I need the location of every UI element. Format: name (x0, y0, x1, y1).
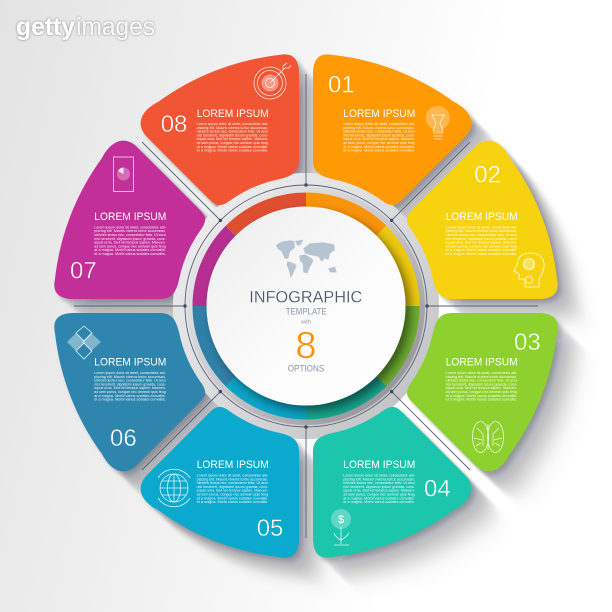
panel 05: nisi hendrerit, dignissim ipsum gravida, cons- (197, 485, 269, 489)
icon: tablet with pie chart (114, 157, 134, 192)
panel 07: LOREM IPSUM (94, 211, 166, 223)
panel 04 (313, 407, 471, 558)
panel 02: Lorem ipsum dolor sit amet, consectetur adi- (446, 225, 518, 229)
panel 02: et a magna. Morbi varius sodales convallis. (446, 252, 517, 256)
panel 03: at a magna. Morbi varius sodales convallis. (446, 394, 517, 398)
watermark (16, 13, 155, 41)
panel 02 (407, 141, 558, 299)
icon: light bulb (426, 106, 450, 139)
panel 01: piscing elit. Mauris viverra tortor accumsan, (343, 126, 415, 130)
panel 07 (54, 141, 205, 299)
icon: head with gears (514, 253, 544, 287)
center title: with (300, 320, 311, 326)
panel 01: at a magna. Morbi varius sodales convallis. (343, 145, 415, 149)
colored ring segments (192, 192, 420, 420)
panel 04: equat urna. Sed vel tempus sapien. Maecen- (343, 489, 416, 493)
panel 01: as sem purus, congue nec aenean quis feug (343, 141, 415, 145)
panel 08: equat urna. Sed vel tempus sapien. Maecen- (197, 137, 269, 141)
panel 05: Lorem ipsum dolor sit amet, consectetur adi- (197, 474, 269, 478)
panel 05 (141, 407, 299, 558)
panel 04: ultricies lectus nec, consectetur felis. Ut arcu (343, 481, 415, 485)
panel 05: piscing elit. Mauris viverra tortor accumsan, (197, 477, 268, 481)
panel 03: 03 (514, 329, 541, 356)
panel 05: as sem purus, congue nec aenean quis feug (197, 492, 268, 496)
panel 07: equat urna. Sed vel tempus sapien. Maecen- (94, 241, 167, 245)
panel 08: as sem purus, congue nec aenean quis feug (197, 141, 268, 145)
panel 03: piscing elit. Mauris viverra tortor accumsan, (446, 375, 517, 379)
panel 07: piscing elit. Mauris viverra tortor accumsan, (94, 229, 166, 233)
icon: target with arrow (254, 63, 291, 99)
panel 07: et a magna. Morbi varius sodales convallis. (94, 252, 166, 256)
panel 02: LOREM IPSUM (446, 211, 518, 223)
panel 01: nisi hendrerit, dignissim ipsum gravida, cons- (343, 133, 416, 137)
panel 06: 06 (110, 425, 137, 452)
panel 07: 07 (70, 258, 97, 285)
panel 07: Lorem ipsum dolor sit amet, consectetur adi- (94, 225, 167, 229)
panel 01: LOREM IPSUM (343, 108, 415, 120)
panel 03: Lorem ipsum dolor sit amet, consectetur adi- (446, 371, 518, 375)
panel 01: et a magna. Morbi varius sodales convallis. (343, 149, 415, 153)
panel 01: ultricies lectus nec, consectetur felis. Ut arcu (343, 130, 415, 134)
panel 04: nisi hendrerit, dignissim ipsum gravida, cons- (343, 485, 416, 489)
panel 08: et a magna. Morbi varius sodales convallis. (197, 149, 268, 153)
panel 06: equat urna. Sed vel tempus sapien. Maecen- (94, 386, 167, 390)
watermark: getty (16, 13, 75, 41)
panel 02: equat urna. Sed vel tempus sapien. Maecen- (446, 241, 518, 245)
panel 03: equat urna. Sed vel tempus sapien. Maecen- (446, 386, 518, 390)
panel 05: equat urna. Sed vel tempus sapien. Maecen- (197, 489, 269, 493)
panel 05: ultricies lectus nec, consectetur felis. Ut arcu (197, 481, 268, 485)
panel 07: nisi hendrerit, dignissim ipsum gravida, cons- (94, 237, 167, 241)
icon: brain (472, 422, 504, 452)
panel 01: equat urna. Sed vel tempus sapien. Maecen- (343, 137, 416, 141)
icon: globe (158, 469, 190, 507)
icon: world map (276, 240, 337, 278)
panel 06: LOREM IPSUM (94, 357, 166, 369)
panel 05: et a magna. Morbi varius sodales convallis. (197, 500, 268, 504)
panel 05: at a magna. Morbi varius sodales convallis. (197, 496, 268, 500)
central backing disc (173, 173, 439, 439)
center title: TEMPLATE (286, 307, 327, 318)
panel 04: Lorem ipsum dolor sit amet, consectetur adi- (343, 474, 416, 478)
panel 06: et a magna. Morbi varius sodales convallis. (94, 398, 166, 402)
center white circle (206, 206, 406, 406)
long shadows behind panels (56, 56, 598, 598)
panel 03: as sem purus, congue nec aenean quis feug (446, 390, 517, 394)
panel 03: nisi hendrerit, dignissim ipsum gravida, cons- (446, 382, 518, 386)
watermark: images (76, 13, 155, 41)
panel 04: et a magna. Morbi varius sodales convallis. (343, 500, 415, 504)
panel 03: ultricies lectus nec, consectetur felis. Ut arcu (446, 379, 517, 383)
icon: dollar plant (331, 509, 351, 545)
panel 02: piscing elit. Mauris viverra tortor accumsan, (446, 229, 517, 233)
panel 08: 08 (161, 111, 187, 138)
panel 06: as sem purus, congue nec aenean quis feug (94, 390, 166, 394)
panel 04: at a magna. Morbi varius sodales convallis. (343, 496, 415, 500)
panel 05: 05 (257, 515, 283, 542)
icon: dollar plant: $ (338, 514, 344, 526)
center hub ring (183, 183, 429, 429)
panel 01 (313, 54, 471, 205)
center title (249, 287, 362, 374)
panel 06: nisi hendrerit, dignissim ipsum gravida, cons- (94, 382, 167, 386)
panel 02: ultricies lectus nec, consectetur felis. Ut arcu (446, 233, 517, 237)
radial connector lines (74, 74, 538, 538)
panel 03 (407, 313, 558, 471)
panel 08: at a magna. Morbi varius sodales convallis. (197, 145, 268, 149)
panel 01: 01 (328, 72, 355, 98)
icon: puzzle (67, 326, 101, 359)
panel 06 (54, 313, 205, 471)
panel 08: nisi hendrerit, dignissim ipsum gravida, cons- (197, 133, 269, 137)
panel 03: LOREM IPSUM (446, 357, 518, 369)
center title: OPTIONS (288, 363, 324, 374)
panel 08 (141, 54, 299, 205)
panel 04: 04 (424, 476, 451, 503)
panel 07: as sem purus, congue nec aenean quis feug (94, 244, 166, 248)
panel 06: Lorem ipsum dolor sit amet, consectetur adi- (94, 371, 167, 375)
panel 03: et a magna. Morbi varius sodales convallis. (446, 398, 517, 402)
panel 07: at a magna. Morbi varius sodales convallis. (94, 248, 166, 252)
panel 06: piscing elit. Mauris viverra tortor accumsan, (94, 375, 166, 379)
panel 05: LOREM IPSUM (197, 459, 269, 471)
panel 08: piscing elit. Mauris viverra tortor accumsan, (197, 126, 268, 130)
panel 02: 02 (474, 162, 501, 189)
panel 04: as sem purus, congue nec aenean quis feug (343, 492, 415, 496)
connector dots (183, 183, 429, 429)
panel 02: as sem purus, congue nec aenean quis feug (446, 244, 517, 248)
panel 06: at a magna. Morbi varius sodales convallis. (94, 394, 166, 398)
panel 08: ultricies lectus nec, consectetur felis. Ut arcu (197, 130, 268, 134)
panel 02: nisi hendrerit, dignissim ipsum gravida, cons- (446, 237, 518, 241)
panel 06: ultricies lectus nec, consectetur felis. Ut arcu (94, 379, 166, 383)
panel 07: ultricies lectus nec, consectetur felis. Ut arcu (94, 233, 166, 237)
panel 02: at a magna. Morbi varius sodales convallis. (446, 248, 517, 252)
panel 08: Lorem ipsum dolor sit amet, consectetur adi- (197, 122, 269, 126)
panel 01: Lorem ipsum dolor sit amet, consectetur adi- (343, 122, 416, 126)
panel 04: piscing elit. Mauris viverra tortor accumsan, (343, 477, 415, 481)
panel 04: LOREM IPSUM (343, 459, 415, 471)
center title: 8 (295, 325, 317, 367)
panel 08: LOREM IPSUM (197, 108, 269, 120)
center title: INFOGRAPHIC (249, 287, 362, 306)
